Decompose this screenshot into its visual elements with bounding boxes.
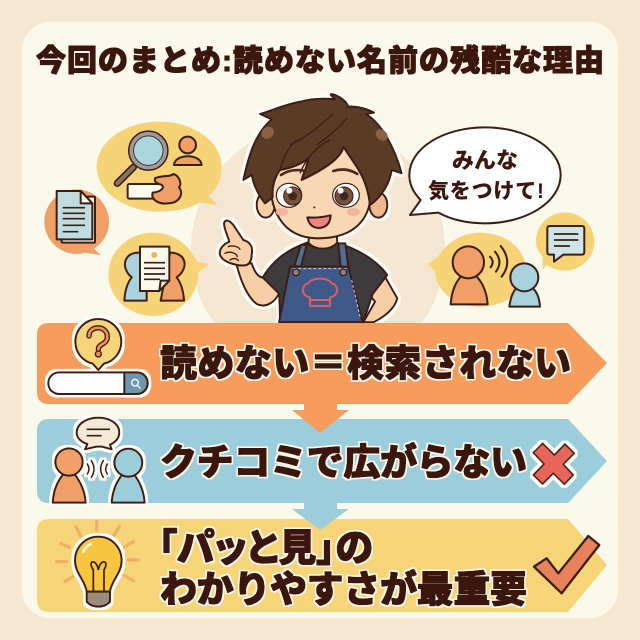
neck	[308, 233, 337, 249]
base	[87, 592, 110, 607]
black t-shirt	[263, 243, 387, 322]
blue person	[112, 449, 145, 503]
bar: blue	[37, 419, 607, 503]
search glyph	[132, 379, 140, 388]
icon: light bulb	[75, 537, 122, 607]
bulb glass	[75, 537, 122, 592]
bar 3 text line 1: 「パッと見」の	[158, 528, 373, 570]
left arm	[237, 263, 280, 306]
talk bubble	[77, 418, 119, 449]
icon: bulb rays	[57, 522, 138, 582]
waves	[87, 461, 107, 477]
backdrop circle behind character	[191, 123, 445, 377]
bubble text line 2: 気をつけて!	[428, 179, 544, 203]
shine	[83, 544, 91, 552]
filament	[91, 562, 106, 592]
search button	[124, 372, 148, 394]
bar 2 text: クチコミで広がらない	[160, 441, 527, 483]
icon: two people with paper bubble	[108, 233, 208, 316]
bar: yellow	[37, 519, 607, 612]
blush	[276, 208, 360, 216]
search bar	[48, 372, 148, 394]
nose	[313, 206, 315, 208]
orange person	[53, 448, 86, 503]
title: 今回のまとめ:読めない名前の残酷な理由	[36, 44, 604, 78]
icon: two people talking	[53, 418, 145, 503]
speech bubble: everyone be careful	[409, 127, 561, 223]
bar 3 text line 2: わかりやすさが最重要	[160, 568, 527, 610]
ear right	[369, 192, 387, 218]
left speech bubbles group	[44, 122, 222, 316]
question bubble	[75, 319, 121, 370]
icon: check mark	[534, 536, 599, 593]
icon: magnifier and name bubble	[97, 122, 222, 212]
apron	[279, 243, 363, 322]
eyebrows	[281, 170, 357, 175]
hand pointing	[220, 220, 252, 265]
icon: document bubble	[44, 189, 109, 255]
right arm on hip	[363, 277, 397, 322]
icon: people talking bubble	[428, 233, 540, 307]
mouth	[307, 215, 331, 228]
lines in bubble	[87, 429, 110, 436]
face	[270, 140, 371, 238]
question dot	[95, 351, 101, 357]
hair	[243, 94, 402, 205]
icon: question bubble and search bar	[48, 319, 148, 394]
bar: orange	[37, 323, 607, 404]
right eye	[333, 183, 359, 207]
question mark	[89, 328, 107, 349]
bubble shape	[409, 127, 561, 223]
icon: red cross	[533, 443, 574, 484]
right bubbles group	[428, 212, 594, 307]
arrow: orange down	[292, 404, 349, 433]
ear left	[257, 192, 275, 218]
left eye	[276, 183, 302, 207]
icon: small message bubble	[536, 212, 594, 271]
arrow: blue down	[292, 503, 349, 530]
question mark orange	[89, 328, 107, 349]
bubble text line 1: みんな	[452, 148, 518, 173]
character: chef boy pointing	[220, 94, 402, 322]
bar 1 text: 読めない＝検索されない	[160, 343, 571, 384]
